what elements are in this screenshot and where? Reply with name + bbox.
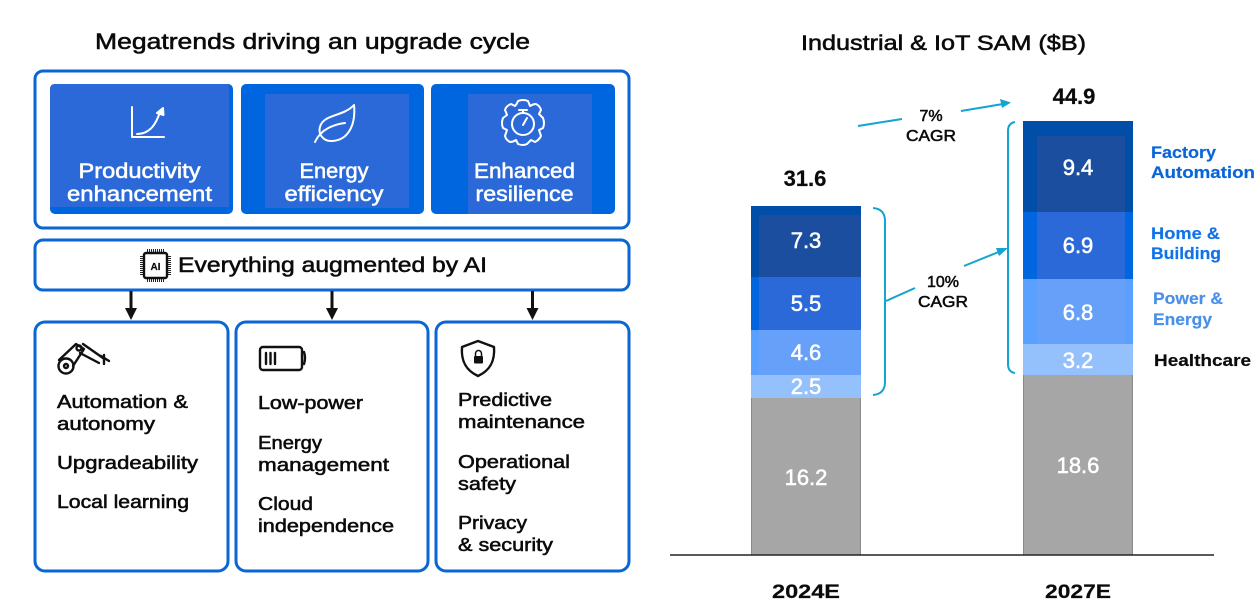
panel: automation: Automation & — [57, 391, 189, 412]
arrow: 10% CAGR — [886, 248, 1008, 311]
legend: factory automation: Factory — [1151, 143, 1217, 162]
arrow: 7% CAGR: 7% — [919, 108, 943, 125]
card: enhanced resilience — [431, 84, 615, 214]
axis baseline — [670, 554, 1214, 556]
card: energy efficiency — [241, 84, 424, 214]
legend: power and energy: Energy — [1153, 310, 1213, 329]
stacked bar: 2027E: 18.6 — [1057, 453, 1099, 478]
card: enhanced resilience: resilience — [476, 183, 574, 206]
card: energy efficiency: Energy — [300, 160, 369, 183]
icon: leaf — [315, 105, 354, 142]
icon: AI chip: AI — [150, 262, 161, 273]
panel: low power: Cloud — [258, 493, 313, 514]
card: productivity enhancement — [50, 84, 233, 214]
total: 31.6: 31.6 — [784, 166, 826, 191]
panel: resilience: safety — [458, 473, 517, 494]
panel: resilience — [436, 322, 629, 571]
arrow: 10% CAGR: CAGR — [918, 294, 968, 311]
panel: low power: management — [258, 454, 389, 475]
card: productivity enhancement: enhancement — [67, 183, 212, 206]
legend: factory automation: Automation — [1151, 163, 1255, 182]
bracket: 2027E segments — [1008, 122, 1015, 373]
legend: home and building — [1151, 224, 1221, 263]
panel: megatrends — [35, 71, 629, 228]
stacked bar: 2024E: 5.5 — [791, 291, 821, 316]
stacked bar: 2024E: 2.5 — [791, 374, 821, 399]
bracket: 2024E segments — [873, 208, 885, 395]
stacked bar: 2027E: 9.4 — [1063, 155, 1093, 180]
total: 44.9: 44.9 — [1053, 84, 1095, 109]
axis label: 2024E: 2024E — [772, 581, 840, 603]
panel: automation: autonomy — [57, 413, 156, 434]
arrow: to predictive maintenance — [526, 291, 538, 320]
stacked bar: 2024E: 4.6 — [791, 340, 821, 365]
panel: low power: Energy — [258, 432, 323, 453]
card: energy efficiency: efficiency — [284, 183, 384, 206]
legend: home and building: Home & — [1151, 224, 1220, 243]
icon: shield with lock — [462, 341, 494, 376]
panel: resilience: Operational — [458, 451, 570, 472]
stacked bar: 2027E: 6.9 — [1063, 233, 1093, 258]
arrow: to automation — [125, 291, 137, 320]
arrow: 7% CAGR: CAGR — [906, 128, 956, 145]
icon: battery — [260, 347, 305, 370]
panel: low power: Low-power — [258, 392, 363, 413]
legend: power and energy — [1153, 289, 1223, 329]
panel: automation — [35, 322, 228, 571]
panel: everything augmented by AI: Everything augmented by AI — [178, 253, 487, 277]
legend: home and building: Building — [1151, 244, 1221, 263]
icon: AI chip — [142, 250, 170, 280]
panel: resilience: maintenance — [458, 411, 585, 432]
arrow: to low-power — [326, 291, 338, 320]
stacked bar: 2027E: 3.2 — [1063, 348, 1093, 373]
stacked bar: 2024E: 7.3 — [791, 228, 821, 253]
legend: factory automation — [1151, 143, 1255, 182]
panel: low power: independence — [258, 515, 394, 536]
arrow: 10% CAGR: 10% — [927, 274, 959, 291]
stacked bar: 2024E: 16.2 — [785, 465, 827, 490]
panel: resilience: & security — [458, 534, 554, 555]
panel: everything augmented by AI — [35, 240, 629, 290]
arrow: 7% CAGR — [858, 99, 1011, 145]
legend: healthcare: Healthcare — [1154, 351, 1251, 370]
card: enhanced resilience: Enhanced — [474, 160, 575, 183]
icon: growth chart — [132, 107, 164, 137]
stacked bar: 2027E: 6.8 — [1063, 300, 1093, 325]
legend: power and energy: Power & — [1153, 289, 1223, 308]
stacked bar: 2027E — [1023, 121, 1133, 555]
card: productivity enhancement: Productivity — [78, 160, 201, 183]
right heading: Industrial & IoT SAM ($B) — [801, 32, 1086, 55]
icon: gear with stopwatch — [502, 100, 544, 145]
panel: resilience: Predictive — [458, 389, 552, 410]
left heading: Megatrends driving an upgrade cycle — [95, 29, 530, 54]
panel: automation: Upgradeability — [57, 452, 199, 473]
icon: robot arm — [58, 344, 109, 374]
stacked bar: 2024E — [751, 206, 861, 555]
panel: automation: Local learning — [57, 491, 189, 512]
panel: resilience: Privacy — [458, 512, 528, 533]
panel: low power — [236, 322, 428, 571]
axis label: 2027E: 2027E — [1045, 581, 1111, 603]
